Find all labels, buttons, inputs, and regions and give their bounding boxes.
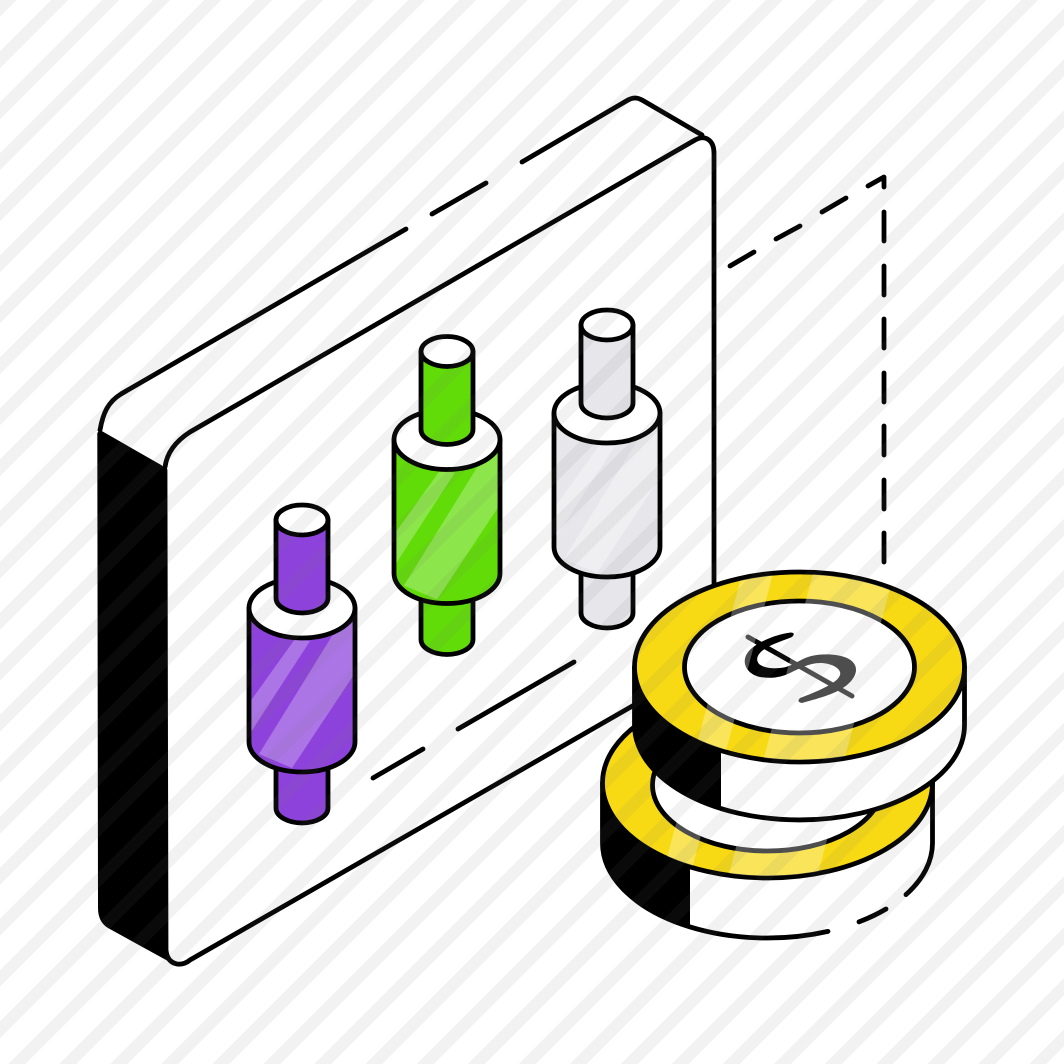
- icon: dollar sign: [745, 632, 856, 703]
- board left black side: [97, 430, 177, 966]
- board outlines: [100, 98, 714, 964]
- board top face: [100, 98, 708, 467]
- back dashed guide frame: [730, 177, 884, 562]
- coin glass highlights: [698, 574, 890, 760]
- upper coin: [634, 570, 964, 820]
- panel: chart board: [97, 98, 716, 966]
- candlestick: purple: [247, 505, 357, 823]
- panel inner dashed baseline: [373, 662, 574, 778]
- board front face: [165, 138, 716, 963]
- candlestick: green: [392, 336, 502, 654]
- candlestick: grey: [552, 310, 662, 628]
- lower coin: [600, 726, 935, 940]
